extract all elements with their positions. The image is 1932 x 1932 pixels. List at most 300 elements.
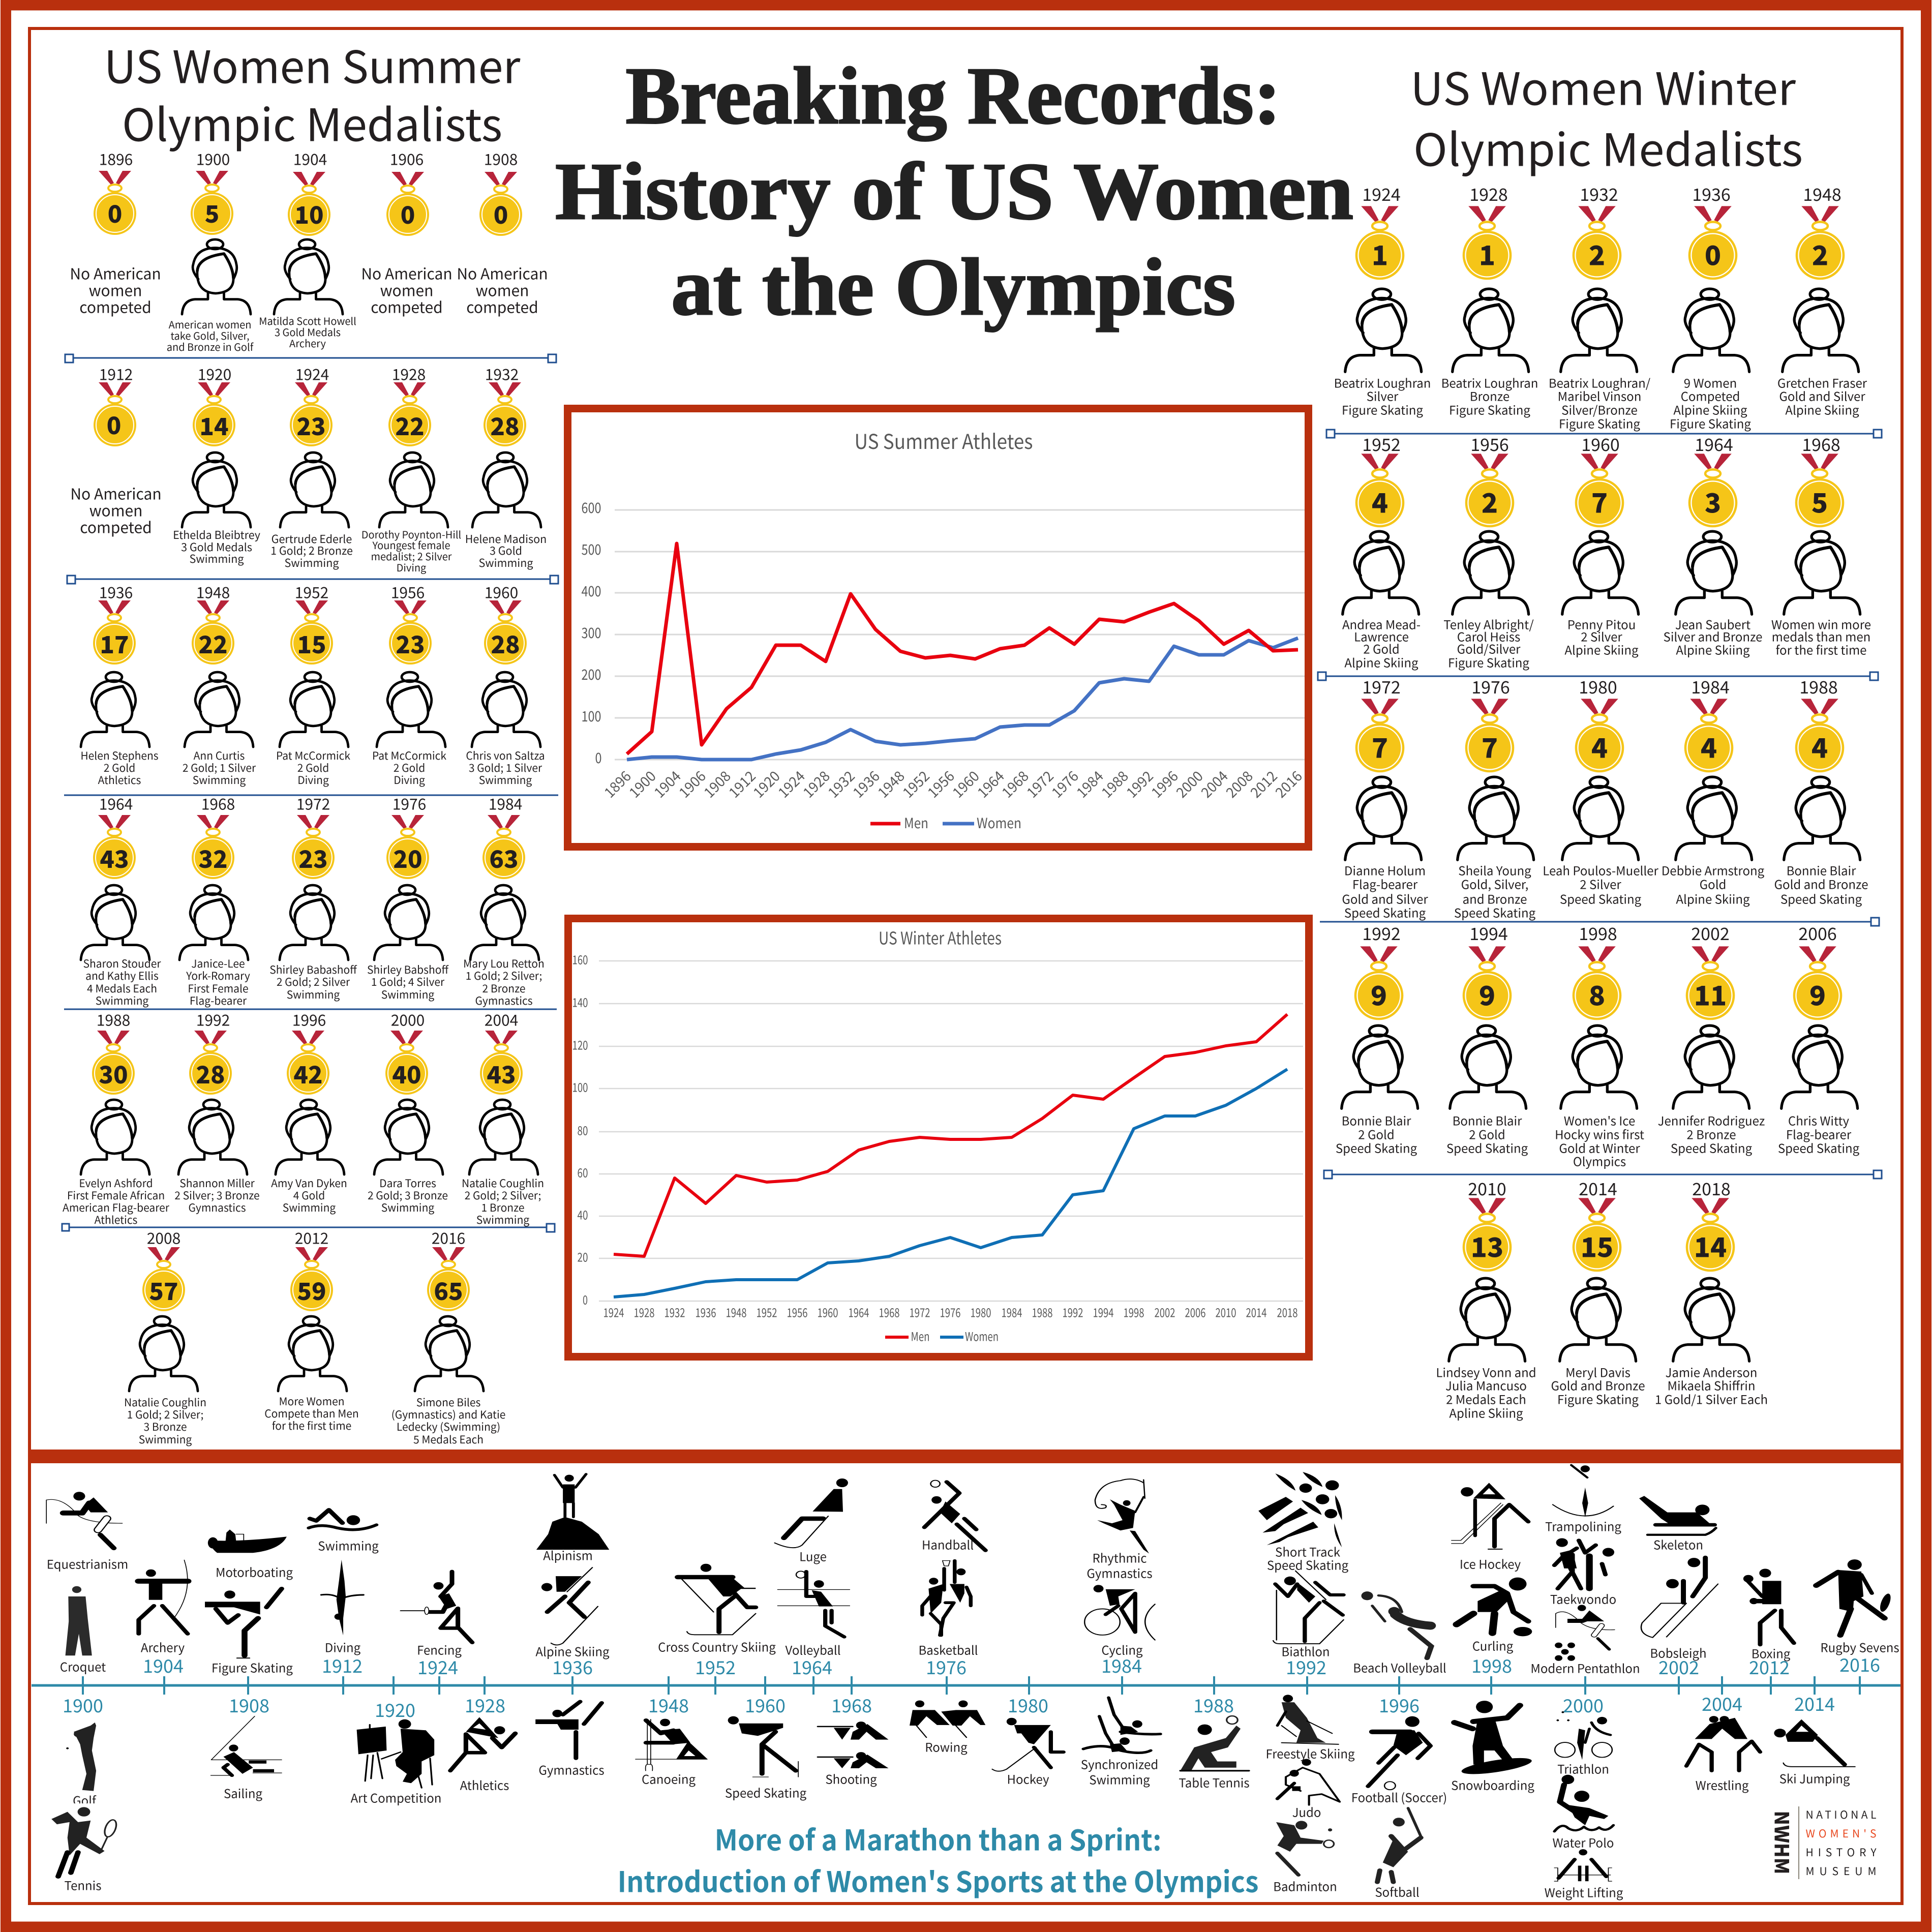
- medal: 1988 winter: Speed Skating: [1780, 889, 1862, 907]
- timeline year labels: 1928: [465, 1692, 505, 1718]
- medal: 2014 winter: Meryl Davis: [1565, 1363, 1631, 1380]
- medal: 1928: Youngest female: [372, 537, 450, 552]
- icon: biathlon: [1273, 1571, 1344, 1644]
- chart: US Winter Athletes: 60: [578, 1163, 588, 1181]
- sport labels: Hockey: [1007, 1769, 1049, 1788]
- icon: alpinism: [536, 1474, 609, 1550]
- medal: 1906: women: [380, 279, 433, 301]
- medal: 1928 winter: Figure Skating: [1449, 400, 1530, 418]
- medal: 1906: competed: [371, 295, 443, 317]
- medal: 1988 winter: 1988: [1799, 674, 1838, 699]
- medal: 1976: Shirley Babshoff: [367, 962, 449, 977]
- timeline year labels: 1920: [375, 1696, 415, 1723]
- medal: 1900: [167, 147, 254, 354]
- medal: 1936 winter: Alpine Skiing: [1673, 400, 1747, 418]
- divider: [67, 576, 558, 584]
- medal: 1960: 3 Gold; 1 Silver: [469, 760, 542, 775]
- sport labels: Badminton: [1273, 1877, 1337, 1894]
- sport labels: Bobsleigh: [1650, 1643, 1707, 1662]
- medal: 1994 winter: 1994: [1469, 920, 1508, 945]
- chart: US Winter Athletes: 1964: [848, 1303, 869, 1321]
- medal: 2008: [124, 1226, 206, 1447]
- medal: 1932: Swimming: [479, 554, 533, 570]
- chart: US Summer Athletes: 1964: [973, 766, 1008, 802]
- medal: 1912: competed: [80, 516, 152, 538]
- chart: US Summer Athletes: 1952: [898, 766, 933, 802]
- medal: 1948 winter: Gretchen Fraser: [1777, 373, 1867, 391]
- medal: 1924: Swimming: [285, 554, 339, 570]
- medal: 1900: take Gold, Silver,: [170, 327, 250, 343]
- medal: 1968 winter: 1968: [1802, 431, 1840, 456]
- medal: 1948 winter: 2: [1812, 235, 1828, 274]
- medal: 1960: 1960: [485, 581, 518, 603]
- medal: 1924: 1924: [295, 362, 329, 384]
- chart: US Summer Athletes: US Summer Athletes: [854, 426, 1033, 455]
- medal: 1998 winter: Olympics: [1573, 1152, 1626, 1169]
- medal: 1952 winter: 4: [1372, 482, 1388, 521]
- timeline year labels: 1908: [229, 1692, 269, 1718]
- sport labels: Freestyle Skiing: [1265, 1744, 1355, 1762]
- panel: summer row 5: [63, 1008, 544, 1227]
- chart: US Winter Athletes: 120: [572, 1035, 588, 1053]
- medal: 1968 winter: [1771, 431, 1871, 658]
- sport labels: Swimming: [1089, 1770, 1150, 1788]
- medal: 1924 winter: 1: [1372, 235, 1388, 274]
- medal: 1928 winter: Beatrix Loughran: [1441, 373, 1538, 391]
- medal: 1984: 1 Gold; 2 Silver;: [466, 968, 542, 983]
- chart: US Summer Athletes: Women: [977, 812, 1021, 833]
- medal: 1988 winter: 4: [1812, 727, 1828, 766]
- medal: 2010 winter: Lindsey Vonn and: [1436, 1363, 1536, 1380]
- sport labels: Boxing: [1752, 1644, 1791, 1662]
- medal: 1928 winter: Bronze: [1470, 386, 1510, 404]
- medal: 1906: No American: [361, 261, 452, 284]
- medal: 1988 winter: [1774, 674, 1868, 907]
- icon: trampolining: [1553, 1465, 1613, 1517]
- medal: 1924 winter: [1334, 181, 1431, 418]
- divider: [1326, 430, 1882, 438]
- medal: 1992 winter: 2 Gold: [1358, 1125, 1395, 1142]
- icon: sailing: [211, 1716, 282, 1775]
- medal: 1948 winter: [1777, 181, 1867, 418]
- chart: US Summer Athletes: 1908: [699, 766, 735, 802]
- chart: US Winter Athletes: 80: [578, 1121, 588, 1139]
- sport labels: Tennis: [64, 1876, 102, 1893]
- medal: 2004: Natalie Coughlin: [462, 1175, 544, 1191]
- icon: athletics: [450, 1717, 515, 1771]
- sport labels: Judo: [1292, 1803, 1321, 1820]
- closing heading: [617, 1818, 1259, 1900]
- chart: US Winter Athletes: 1948: [726, 1303, 746, 1321]
- icon: tennis: [51, 1803, 120, 1880]
- medal: 1988: First Female African: [67, 1188, 165, 1203]
- medal: 2000: [368, 1008, 448, 1215]
- closing heading: More of a Marathon than a Sprint:: [715, 1818, 1161, 1859]
- medal: 1932 winter: Maribel Vinson: [1558, 386, 1641, 404]
- medal: 2014 winter: 15: [1581, 1226, 1613, 1265]
- medal: 1936: Helen Stephens: [80, 748, 159, 763]
- medal: 1976 winter: 1976: [1471, 674, 1510, 699]
- medal: 1980 winter: 4: [1591, 727, 1608, 766]
- sport labels: Cycling: [1101, 1640, 1143, 1658]
- sport labels: Motorboating: [216, 1563, 293, 1580]
- timeline year labels: 1980: [1008, 1692, 1048, 1718]
- medal: 1952: 2 Gold: [297, 760, 329, 775]
- sport labels: Equestrianism: [47, 1555, 128, 1572]
- medal: 1932: 1932: [485, 362, 519, 384]
- chart: US Winter Athletes: 1976: [940, 1303, 961, 1321]
- chart: US Summer Athletes: 2000: [1171, 766, 1207, 802]
- medal: 1956 winter: 1956: [1470, 431, 1509, 456]
- medal: 1972 winter: Flag-bearer: [1352, 874, 1418, 892]
- divider: [65, 354, 556, 363]
- medal: 1984 winter: [1662, 674, 1765, 907]
- sport icons, right section: [1258, 1465, 1893, 1882]
- medal: 1992: Gymnastics: [188, 1200, 246, 1215]
- sport labels: Speed Skating: [725, 1784, 807, 1801]
- medal: 1928 winter: 1928: [1469, 181, 1508, 206]
- medal: 1912: 0: [107, 406, 121, 441]
- medal: 1972: 1972: [296, 792, 330, 814]
- medal: 1932 winter: Beatrix Loughran/: [1549, 373, 1651, 391]
- sport labels: Weight Lifting: [1545, 1883, 1623, 1900]
- medal: 1972: Swimming: [287, 987, 340, 1002]
- chart: US Summer Athletes: 1906: [674, 766, 710, 802]
- chart: US Winter Athletes: 140: [572, 992, 588, 1011]
- medal: 1972 winter: Gold and Silver: [1342, 889, 1428, 907]
- medal: 1956 winter: Tenley Albright/: [1443, 615, 1534, 632]
- chart: US Winter Athletes: 1998: [1124, 1303, 1144, 1321]
- medal: 2018 winter: Mikaela Shiffrin: [1667, 1376, 1756, 1394]
- medal: 1896: 0: [108, 195, 122, 230]
- icon: volleyball: [777, 1571, 850, 1637]
- icon: diving: [321, 1560, 364, 1636]
- medal: 2012: for the first time: [272, 1418, 351, 1433]
- medal: 1992 winter: Bonnie Blair: [1342, 1111, 1411, 1129]
- medal: 1992: Shannon Miller: [179, 1175, 255, 1191]
- medal: 1964 winter: Alpine Skiing: [1676, 640, 1750, 658]
- medal: 2010 winter: [1436, 1175, 1536, 1421]
- chart: US Summer Athletes: 1900: [624, 766, 660, 802]
- sport labels: Gymnastics: [1086, 1564, 1153, 1581]
- medal: 1932: Helene Madison: [465, 531, 547, 546]
- medal: 1968: 32: [198, 840, 228, 875]
- timeline year labels: 1992: [1286, 1653, 1326, 1680]
- medal: 1936: 1936: [99, 581, 133, 603]
- medal: 1928: 1928: [392, 362, 426, 384]
- icon: handball: [924, 1481, 985, 1550]
- sport labels: Diving: [325, 1638, 361, 1655]
- medal: 2006 winter: [1778, 920, 1860, 1156]
- medal: 2002 winter: 11: [1694, 975, 1727, 1014]
- icon: motorboat: [208, 1529, 287, 1553]
- chart: US Winter Athletes: 100: [572, 1078, 588, 1095]
- medal: 2012: Compete than Men: [264, 1406, 359, 1421]
- medal: 1988 winter: Gold and Bronze: [1774, 874, 1868, 892]
- medal: 1972: 23: [298, 840, 328, 875]
- medal: 2006 winter: Speed Skating: [1778, 1138, 1860, 1156]
- medal: 1984 winter: Alpine Skiing: [1676, 889, 1750, 907]
- sport labels: Curling: [1472, 1636, 1514, 1654]
- medal: 1972 winter: Speed Skating: [1344, 903, 1426, 921]
- medal: 1948: Ann Curtis: [194, 748, 245, 763]
- medal: 1976 winter: Speed Skating: [1454, 903, 1536, 921]
- timeline year labels: 1936: [552, 1653, 593, 1680]
- icon: canoeing: [636, 1719, 707, 1771]
- medal: 1952: Pat McCormick: [276, 748, 350, 763]
- chart: US Summer Athletes: 1932: [823, 766, 859, 802]
- divider: [1318, 672, 1878, 680]
- chart: US Winter Athletes: 1956: [787, 1303, 807, 1321]
- medal: 1920: [173, 362, 260, 566]
- sport labels: Volleyball: [785, 1640, 841, 1658]
- medal: 2004: 1 Bronze: [481, 1200, 525, 1215]
- medal: 1920: 1920: [198, 362, 231, 384]
- sport labels: Golf: [73, 1791, 97, 1809]
- medal: 2006 winter: Flag-bearer: [1786, 1125, 1852, 1142]
- medal: 2008: Natalie Coughlin: [124, 1395, 206, 1410]
- medal: 1896: women: [89, 279, 142, 301]
- medal: 2000: Swimming: [381, 1200, 434, 1215]
- medal: 2004: [462, 1008, 544, 1227]
- medal: 1976: [367, 792, 449, 1002]
- medal: 1900: 5: [205, 195, 219, 230]
- icon: synchronized swimming: [1083, 1698, 1160, 1753]
- sport labels: Snowboarding: [1451, 1775, 1534, 1794]
- chart: US Summer Athletes: 1956: [923, 766, 958, 802]
- divider: [64, 794, 558, 796]
- medal: 1992: 28: [196, 1055, 225, 1091]
- timeline year labels: 1968: [831, 1692, 872, 1718]
- medal: 1964 winter: Silver and Bronze: [1664, 627, 1762, 645]
- medal: 2006 winter: 9: [1809, 975, 1826, 1014]
- chart: US Summer Athletes: 1992: [1122, 766, 1157, 802]
- medal: 1920: Swimming: [190, 550, 244, 566]
- medal: 2016: [391, 1226, 505, 1447]
- medal: 1988: American Flag-bearer: [63, 1200, 170, 1215]
- timeline axis: [32, 1676, 1900, 1695]
- medal: 2008: Swimming: [139, 1432, 192, 1447]
- logo: National Women's History Museum: NWHM: [1769, 1811, 1797, 1874]
- medal: 1952: [276, 581, 350, 788]
- sport labels: Canoeing: [642, 1769, 696, 1788]
- medal: 1964 winter: [1664, 431, 1762, 658]
- medal: 1956 winter: Carol Heiss: [1457, 627, 1520, 645]
- timeline year labels: 2004: [1702, 1690, 1742, 1716]
- logo: National Women's History Museum: MUSEUM: [1806, 1863, 1876, 1879]
- medal: 1992 winter: 9: [1371, 975, 1387, 1014]
- medal: 1948: 1948: [196, 581, 230, 603]
- medal: 1988: 1988: [97, 1008, 130, 1030]
- medal: 2018 winter: 1 Gold/1 Silver Each: [1655, 1390, 1768, 1407]
- icon: ski jumping: [1774, 1719, 1855, 1767]
- sport icons, middle section: [636, 1478, 1249, 1777]
- heading: winter medalists: [1410, 54, 1803, 179]
- medal: 1994 winter: Speed Skating: [1446, 1138, 1528, 1156]
- medal: 1994 winter: 9: [1479, 975, 1495, 1014]
- title: at the Olympics: [671, 242, 1235, 332]
- timeline year labels: 1960: [745, 1692, 786, 1718]
- medal: 1924 winter: Beatrix Loughran: [1334, 373, 1431, 391]
- chart: US Winter Athletes: 40: [578, 1205, 588, 1223]
- medal: 1928: [361, 362, 461, 575]
- sport labels: Handball: [922, 1535, 974, 1553]
- icon: table tennis: [1180, 1716, 1249, 1771]
- chart: US Summer Athletes: 1928: [798, 766, 834, 802]
- panel: summer row 3: [80, 581, 545, 788]
- medal: 1972: Shirley Babashoff: [269, 962, 357, 977]
- timeline year labels: 1948: [648, 1692, 689, 1718]
- sport labels: Table Tennis: [1179, 1773, 1250, 1791]
- chart: US Winter Athletes: 1992: [1063, 1303, 1083, 1321]
- medal: 1932 winter: 1932: [1580, 181, 1618, 206]
- chart: US Winter Athletes: 1928: [633, 1303, 655, 1321]
- chart: US Summer Athletes: 1984: [1072, 766, 1107, 802]
- timeline year labels: 1988: [1193, 1692, 1234, 1718]
- medal: 1972 winter: 1972: [1362, 674, 1401, 699]
- chart: US Summer Athletes: 1924: [773, 766, 809, 802]
- chart: US Summer Athletes: 1976: [1047, 766, 1082, 802]
- medal: 1924: Gertrude Ederle: [271, 531, 352, 546]
- icon: skeleton: [1639, 1496, 1716, 1535]
- medal: 2016: (Gymnastics) and Katie: [391, 1407, 505, 1422]
- medal: 1980 winter: 2 Silver: [1580, 874, 1621, 892]
- medal: 1998 winter: Hocky wins first: [1555, 1125, 1644, 1142]
- chart: US Winter Athletes: 2006: [1185, 1303, 1206, 1321]
- chart: US Summer Athletes: 600: [582, 497, 601, 518]
- medal: 1964: 4 Medals Each: [87, 981, 157, 996]
- chart: US Winter Athletes: 1984: [1002, 1303, 1022, 1321]
- medal: 2010 winter: Apline Skiing: [1449, 1403, 1523, 1421]
- chart: US Summer Athletes: 200: [582, 664, 601, 684]
- medal: 2008: 1 Gold; 2 Silver;: [127, 1407, 203, 1422]
- sport labels: Shooting: [825, 1769, 877, 1788]
- medal: 1932 winter: Figure Skating: [1559, 414, 1640, 432]
- medal: 1936: [80, 581, 159, 788]
- icon: rugby sevens: [1816, 1559, 1893, 1636]
- medal: 1984: 1984: [489, 792, 522, 814]
- medal: 1956: Diving: [394, 772, 425, 788]
- medal: 1960: 28: [491, 625, 520, 660]
- chart: US Summer Athletes: 1948: [873, 766, 909, 802]
- medal: 2002 winter: 2002: [1691, 920, 1730, 945]
- medal: 1988 winter: Bonnie Blair: [1787, 861, 1856, 879]
- medal: 1908: competed: [466, 295, 538, 317]
- sport labels: Archery: [141, 1638, 185, 1655]
- medal: 1924 winter: 1924: [1362, 181, 1401, 206]
- medal: 2008: 2008: [147, 1226, 180, 1249]
- medal: 1932 winter: Silver/Bronze: [1561, 400, 1638, 418]
- icon: bobsleigh: [1641, 1557, 1718, 1638]
- closing heading: Introduction of Women's Sports at the Olympics: [617, 1860, 1259, 1900]
- medal: 1994 winter: [1446, 920, 1528, 1156]
- medal: 2002 winter: Speed Skating: [1671, 1138, 1753, 1156]
- medal: 1984 winter: 4: [1701, 727, 1717, 766]
- medal: 1912: 1912: [99, 362, 133, 384]
- icon: equestrianism: [46, 1492, 122, 1548]
- medal: 1928: 22: [395, 407, 425, 442]
- medal: 1896: 1896: [99, 147, 133, 170]
- medal: 2002 winter: [1658, 920, 1765, 1156]
- chart: US Summer Athletes: 1920: [748, 766, 784, 802]
- band separating medalists and timeline: [28, 1450, 1904, 1463]
- chart: US Summer Athletes: 1996: [1146, 766, 1182, 802]
- medal: 2000: 2000: [391, 1008, 425, 1030]
- medal: 1936: Athletics: [98, 772, 141, 788]
- medal: 1988: 30: [99, 1055, 128, 1091]
- icon: luge: [775, 1478, 848, 1548]
- medal: 2018 winter: 2018: [1692, 1175, 1731, 1200]
- medal: 1948 winter: 1948: [1803, 181, 1842, 206]
- medal: 2008: 57: [149, 1272, 178, 1307]
- medal: 1936 winter: 9 Women: [1684, 373, 1737, 391]
- icon: archery: [138, 1560, 188, 1634]
- chart: US Winter Athletes: 1960: [818, 1303, 838, 1321]
- medal: 2014 winter: [1551, 1175, 1645, 1407]
- medal: 1932: [465, 362, 547, 570]
- sport labels: Luge: [799, 1547, 827, 1565]
- medal: 1924: 23: [296, 407, 326, 442]
- medal: 1976 winter: [1454, 674, 1536, 921]
- medal: 1924: [270, 362, 353, 570]
- medal: 1980 winter: 1980: [1579, 674, 1617, 699]
- medal: 1972: [269, 792, 357, 1002]
- heading: summer medalists: US Women Summer: [104, 32, 521, 97]
- medal: 1908: [457, 147, 548, 317]
- medal: 1928: Dorothy Poynton-Hill: [361, 527, 461, 541]
- medal: 2002 winter: 2 Bronze: [1686, 1125, 1736, 1142]
- medal: 1960: [466, 581, 545, 788]
- medal: 2000: 40: [392, 1055, 421, 1091]
- medal: 1968 winter: 5: [1812, 482, 1828, 521]
- icon: softball: [1377, 1808, 1421, 1882]
- icon: football: [1368, 1716, 1430, 1790]
- medal: 1988: [63, 1008, 170, 1227]
- medal: 1904: Matilda Scott Howell: [259, 313, 356, 327]
- medal: 1912: No American: [70, 482, 162, 504]
- icon: rowing: [910, 1700, 985, 1737]
- chart: US Summer Athletes: 500: [582, 539, 601, 559]
- medal: 1964: and Kathy Ellis: [85, 968, 159, 983]
- heading: summer medalists: Olympic Medalists: [122, 89, 502, 155]
- medal: 1932 winter: 2: [1589, 235, 1605, 274]
- chart: US Winter Athletes: 1924: [603, 1303, 624, 1321]
- medal: 1896: [70, 147, 161, 317]
- medal: 1996: 42: [293, 1055, 323, 1091]
- medal: 2016: 5 Medals Each: [413, 1432, 484, 1447]
- medal: 1964: [81, 792, 161, 1008]
- medal: 1924 winter: Silver: [1367, 386, 1399, 404]
- sport labels: Gymnastics: [538, 1760, 605, 1778]
- sport labels: Short Track: [1275, 1543, 1340, 1560]
- medal: 1980 winter: [1543, 674, 1658, 907]
- chart: US Winter Athletes: 1994: [1093, 1303, 1113, 1321]
- medal: 2018 winter: 14: [1694, 1226, 1727, 1265]
- sport labels: Figure Skating: [212, 1658, 293, 1676]
- chart: US Winter Athletes: 1932: [664, 1303, 685, 1321]
- medal: 1908: No American: [457, 261, 548, 284]
- sport labels: Synchronized: [1081, 1755, 1158, 1772]
- panel: summer row 1: [70, 147, 548, 354]
- timeline year labels: 2012: [1749, 1653, 1790, 1680]
- chart: US Summer Athletes: 1912: [724, 766, 760, 802]
- heading: winter medalists: US Women Winter: [1410, 54, 1796, 118]
- medal: 1952: 15: [297, 625, 326, 660]
- icon: water polo: [1554, 1775, 1613, 1831]
- heading: summer medalists: [104, 32, 521, 155]
- medal: 1948: 2 Gold; 1 Silver: [183, 760, 256, 775]
- medal: 1956: [372, 581, 446, 788]
